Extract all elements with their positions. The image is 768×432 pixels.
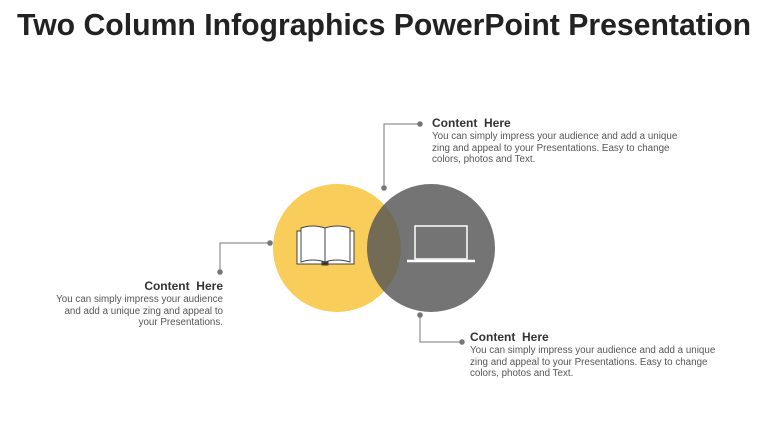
text block: left: Content Here [144,279,223,293]
circle: gray [367,184,495,312]
text block: left: You can simply impress your audience and add a unique zing and appeal to your Presentations. [56,294,223,328]
connector: top [382,122,422,190]
text block: left [56,279,223,328]
text block: top: Content Here [432,116,511,130]
text block: bottom: You can simply impress your audience and add a unique zing and appeal to your Presentations. Easy to change colors, photos and Text. [470,345,715,379]
text block: bottom [470,330,715,379]
text block: top: You can simply impress your audience and add a unique zing and appeal to your Presentations. Easy to change colors, photos and Text. [432,131,677,165]
icon: book [297,226,354,265]
icon: laptop [407,226,475,261]
text block: top [432,116,677,165]
circle: yellow [273,184,401,312]
title: Two Column Infographics PowerPoint Presentation [17,9,751,42]
text block: bottom: Content Here [470,330,549,344]
connector: left [218,241,272,274]
connector: bottom [418,313,464,344]
